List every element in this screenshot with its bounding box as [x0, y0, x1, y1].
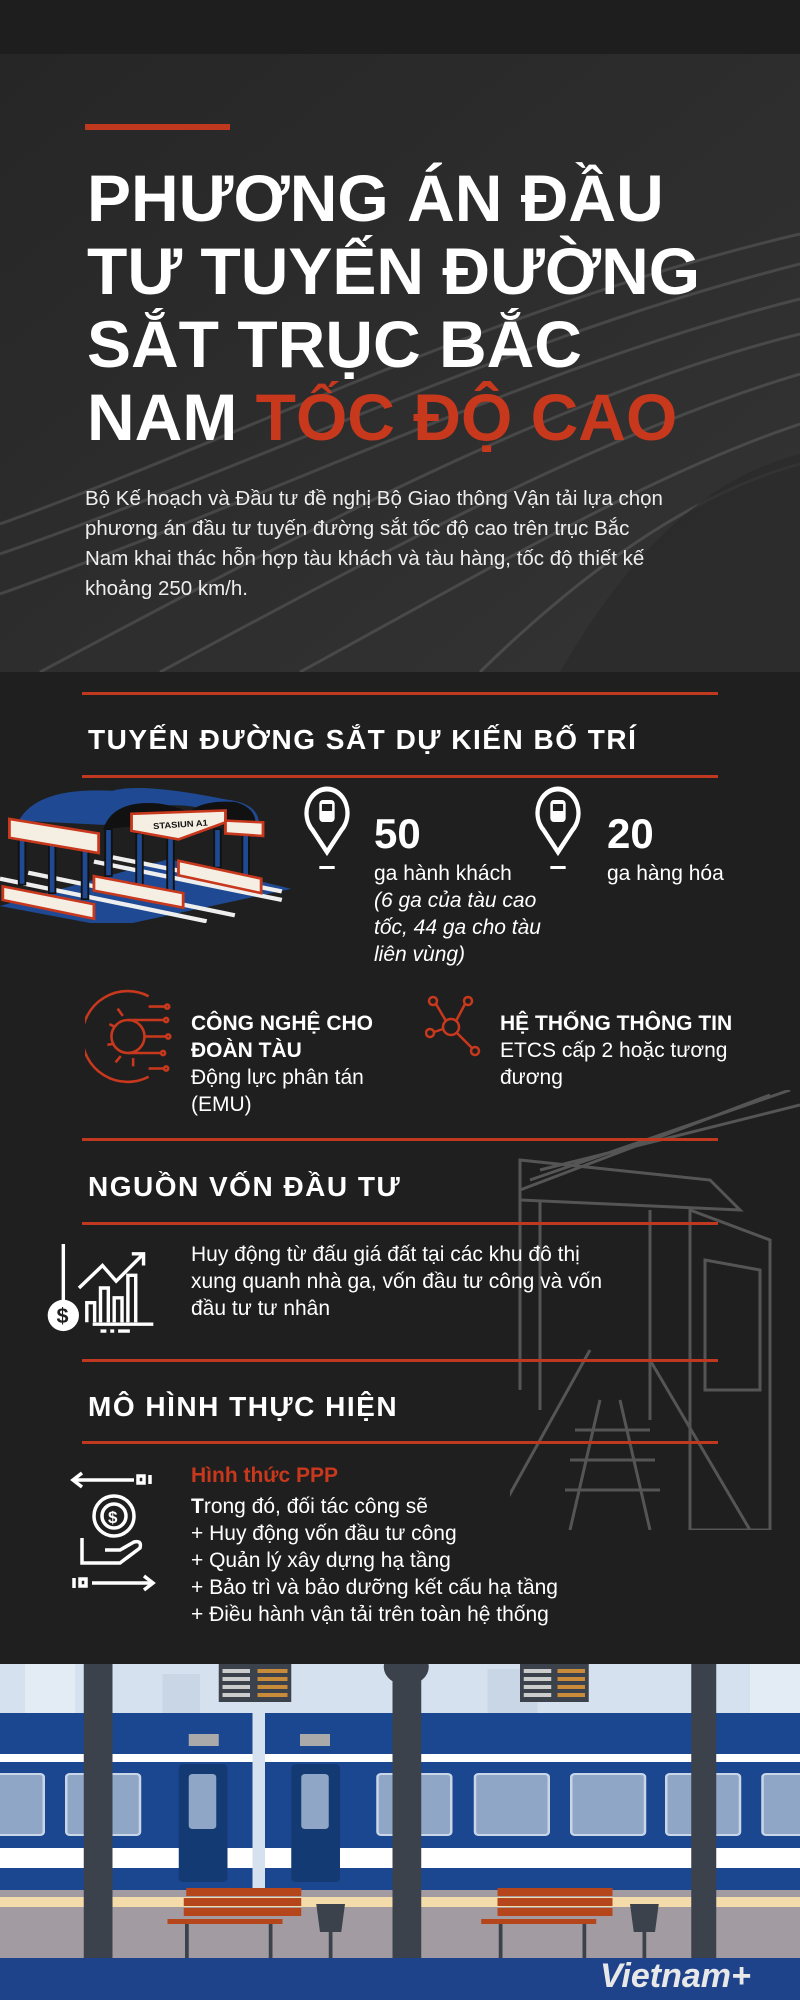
funding block: Huy động từ đấu giá đất tại các khu đô thị — [191, 1243, 580, 1266]
stat: 20 freight stations — [535, 786, 724, 885]
intro paragraph: phương án đầu tư tuyến đường sắt tốc độ cao trên trục Bắc — [85, 517, 629, 540]
funding block: đầu tư tư nhân — [191, 1297, 330, 1320]
logo: Vietnam+: Vietnam+ — [600, 1957, 751, 1995]
heading: tuyến đường sắt: TUYẾN ĐƯỜNG SẮT DỰ KIẾN BỐ TRÍ — [88, 724, 637, 755]
hero background — [0, 54, 800, 672]
title: PHƯƠNG ÁN ĐẦU — [87, 161, 664, 235]
title: NAM TỐC ĐỘ CAO — [87, 380, 677, 454]
icon: station illustration — [0, 788, 291, 923]
funding block — [48, 1243, 602, 1333]
intro paragraph — [85, 487, 663, 600]
PPP block: Trong đó, đối tác công sẽ — [191, 1495, 428, 1518]
stat: 50 passenger stations: (6 ga của tàu cao — [374, 889, 536, 912]
technology block: (EMU) — [191, 1093, 252, 1116]
icon: hand money arrows — [70, 1472, 156, 1592]
stat: 50 passenger stations: liên vùng) — [374, 943, 465, 966]
stat: 20 freight stations: ga hàng hóa — [607, 862, 724, 885]
technology block — [85, 990, 373, 1116]
icon: network nodes — [425, 996, 480, 1056]
icon: gear circuit — [85, 990, 172, 1084]
bottom illustration: train at platform — [0, 1664, 800, 1958]
PPP block: Hình thức PPP — [191, 1464, 338, 1487]
technology block: ĐOÀN TÀU — [191, 1039, 302, 1062]
icon: hand money arrows: $ — [108, 1508, 118, 1527]
stat: 50 passenger stations: tốc, 44 ga cho tàu — [374, 916, 541, 939]
intro paragraph: Bộ Kế hoạch và Đầu tư đề nghị Bộ Giao thông Vận tải lựa chọn — [85, 487, 663, 510]
title: TƯ TUYẾN ĐƯỜNG — [87, 234, 700, 308]
icon: location pin train — [304, 786, 350, 869]
hero accent line — [85, 124, 230, 130]
stat: 50 passenger stations: ga hành khách — [374, 862, 512, 885]
title: SẮT TRỤC BẮC — [87, 307, 582, 381]
icon: location pin train 2 — [535, 786, 581, 869]
PPP block: + Bảo trì và bảo dưỡng kết cấu hạ tầng — [191, 1576, 558, 1599]
PPP block: + Huy động vốn đầu tư công — [191, 1522, 457, 1545]
icon: finance chart: $ — [56, 1304, 68, 1328]
info system block: đương — [500, 1066, 563, 1089]
icon: finance chart — [48, 1244, 154, 1333]
top bar — [0, 0, 800, 54]
icon: station illustration: STASIUN A1 — [153, 818, 208, 831]
intro paragraph: Nam khai thác hỗn hợp tàu khách và tàu hàng, tốc độ thiết kế — [85, 547, 644, 570]
intro paragraph: khoảng 250 km/h. — [85, 577, 248, 600]
stat: 50 passenger stations — [304, 786, 541, 966]
PPP block: + Điều hành vận tải trên toàn hệ thống — [191, 1603, 549, 1626]
PPP block: + Quản lý xây dựng hạ tầng — [191, 1549, 451, 1572]
technology block: Động lực phân tán — [191, 1066, 364, 1089]
info system block: HỆ THỐNG THÔNG TIN — [500, 1012, 732, 1035]
info system block — [425, 996, 732, 1089]
info system block: ETCS cấp 2 hoặc tương — [500, 1039, 727, 1062]
PPP block — [70, 1464, 558, 1626]
stat: 20 freight stations: 20 — [607, 810, 654, 857]
stat: 50 passenger stations: 50 — [374, 810, 421, 857]
heading: mô hình: MÔ HÌNH THỰC HIỆN — [88, 1391, 398, 1422]
technology block: CÔNG NGHỆ CHO — [191, 1012, 373, 1035]
footer bar — [0, 1958, 800, 2000]
background sketch: station — [510, 1090, 800, 1530]
heading: nguồn vốn: NGUỒN VỐN ĐẦU TƯ — [88, 1171, 401, 1202]
funding block: xung quanh nhà ga, vốn đầu tư công và vốn — [191, 1270, 602, 1293]
title — [87, 161, 700, 454]
